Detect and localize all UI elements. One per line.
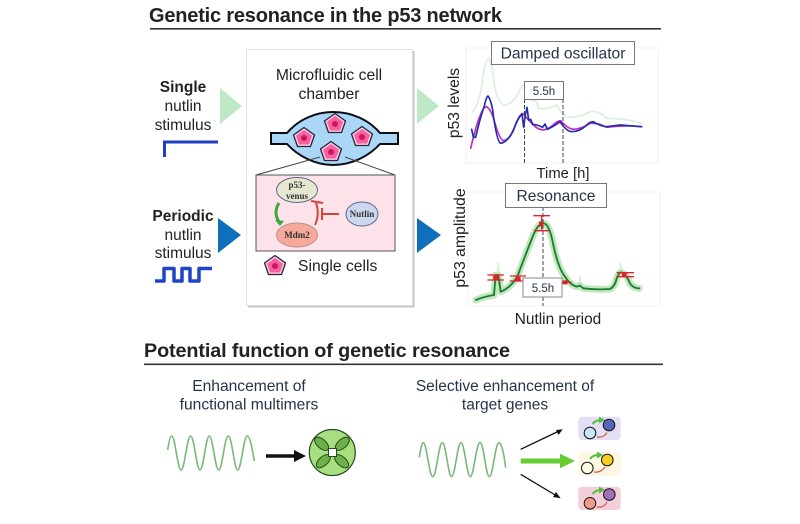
text: selective enhancement: target genes [462,396,548,414]
arrow: to bottom gene [521,474,561,498]
icon: periodic square wave stimulus [155,268,212,281]
network inset: p53- [288,180,306,190]
text: enhancement of functional multimers: functional multimers [180,396,319,414]
chart: resonance [452,184,660,328]
gene module: middle [578,452,621,476]
red error bars [487,216,634,282]
arrow: to top gene [521,429,563,449]
network inset: Nutlin [350,209,374,219]
chart title: Resonance [517,188,595,205]
periodic nutlin stimulus label: Periodic [152,208,214,225]
icon: single step stimulus [164,142,218,157]
network inset: venus [286,191,308,201]
arrow: to multimer [266,450,306,462]
panel: microfluidic cell chamber [246,50,414,308]
5.5h label: 5.5h [532,283,554,295]
legend: single cells [264,256,378,275]
arrow: single to chamber [220,88,242,124]
y axis label: p53 amplitude [452,188,469,288]
single nutlin stimulus label: Single [160,79,207,96]
chart: damped oscillator [446,42,658,182]
chart title: Damped oscillator [501,46,625,62]
curves [471,58,642,148]
gene module: bottom [578,486,621,510]
cells in chamber [294,114,372,160]
5.5h label: 5.5h [533,86,555,98]
periodic nutlin stimulus label [152,208,214,262]
network inset: Mdm2 [284,230,310,240]
chart title [492,42,634,64]
x axis label: Nutlin period [515,311,601,328]
heading: potential function: Potential function of genetic resonance [144,340,510,362]
5.5h label [524,82,564,100]
chamber outline [271,112,398,165]
arrow: to middle gene [521,454,575,468]
chamber heading: Microfluidic cell [276,67,382,84]
periodic nutlin stimulus label: nutlin [164,227,202,244]
network inset [256,175,395,251]
wave: left sine [168,436,254,470]
zoom lines [256,157,395,175]
arrow: periodic output [417,218,441,253]
single nutlin stimulus label: nutlin [164,98,202,115]
periodic nutlin stimulus label: stimulus [155,245,212,262]
single nutlin stimulus label [155,79,212,134]
dashed marker [542,207,544,306]
legend: single cells: Single cells [298,258,378,275]
5.5h label [523,278,562,297]
text: enhancement of functional multimers: Enhancement of [192,378,306,395]
title: genetic resonance: Genetic resonance in the p53 network [149,5,503,27]
x axis label: Time [h] [537,166,589,182]
text: selective enhancement: Selective enhancement of [416,378,594,395]
gene module: top [578,416,621,440]
chart title [506,184,606,208]
icon: multimer [309,430,355,476]
arrow: single output [417,88,439,124]
single nutlin stimulus label: stimulus [155,117,212,134]
wave: right sine [419,443,506,477]
arrow: periodic to chamber [218,218,241,253]
amplitude curve [476,223,639,300]
chamber heading: chamber [298,86,360,103]
dashed markers [524,99,563,163]
y axis label: p53 levels [446,68,463,138]
